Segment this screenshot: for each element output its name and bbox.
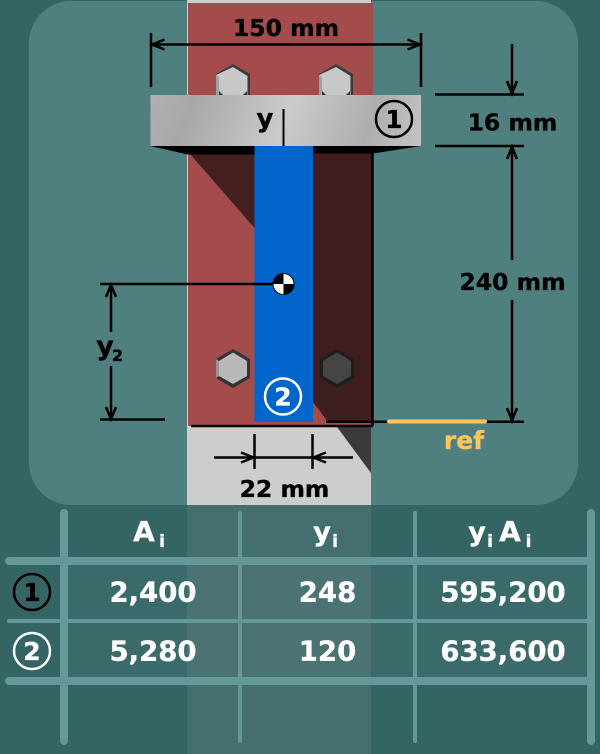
grey shadow on base (337, 427, 371, 473)
red web plate (188, 3, 373, 426)
dimension: 16 mm (435, 44, 557, 146)
header: Ai (133, 515, 165, 552)
row 2 values: 633,600 (440, 636, 566, 668)
header: Ai: A (133, 515, 155, 548)
dimension: 240 mm: 240 mm (459, 268, 566, 296)
part marker 1 (376, 101, 412, 137)
dimension: 150 mm (151, 14, 421, 87)
bolt: top right (319, 64, 353, 96)
header: yiAi (468, 515, 531, 552)
blue web top over shadow (254, 146, 313, 156)
header: yi: i (332, 532, 338, 552)
row 1 values: 595,200 (440, 576, 566, 608)
rounded panel (29, 1, 578, 505)
row 1 values: 2,400 (110, 576, 196, 608)
row 2 values: 5,280 (110, 636, 196, 668)
plate edges (191, 150, 373, 426)
dimension: 22 mm (214, 434, 353, 503)
centroid symbol (272, 273, 294, 295)
row marker 2: 2 (23, 637, 41, 666)
dimension: 240 mm (459, 147, 566, 421)
table (5, 509, 595, 745)
reference line: ref (444, 426, 485, 455)
header: yiAi: i (526, 532, 531, 552)
header: yiAi: A (499, 515, 521, 548)
part marker 1: 1 (385, 105, 403, 134)
axis label y with tick (257, 104, 284, 146)
row marker 2 (14, 633, 50, 669)
flange (150, 95, 421, 146)
dimension: y2: y (96, 331, 114, 362)
blue web (254, 146, 313, 422)
header: yi (313, 517, 338, 552)
flange shadow (150, 146, 421, 154)
row 1 values: 248 (299, 576, 356, 608)
bolt: bottom left (216, 349, 250, 388)
row marker 1 (14, 574, 50, 610)
part marker 2: 2 (274, 382, 292, 412)
header: Ai: i (159, 532, 165, 552)
part marker 2 (265, 378, 301, 414)
row marker 1: 1 (23, 578, 41, 607)
bolt: top left (216, 64, 250, 96)
table grid (5, 509, 595, 745)
bolt: bottom right (320, 349, 354, 388)
centroid leader line (100, 283, 283, 285)
header: yiAi: y (468, 517, 486, 548)
column strip behind table (187, 505, 371, 754)
shadow triangle on flange underside (190, 154, 254, 228)
header: yi: y (313, 517, 331, 548)
axis label y with tick: y (257, 104, 274, 134)
dimension: 150 mm: 150 mm (233, 14, 339, 42)
table row shading (68, 565, 587, 681)
dimension: y2 (96, 285, 165, 420)
light base plate (187, 0, 371, 505)
dimension: y2: 2 (112, 346, 123, 365)
row 2 values: 120 (299, 636, 356, 668)
dimension: 16 mm: 16 mm (468, 108, 557, 136)
dimension: 22 mm: 22 mm (240, 475, 329, 503)
dark right side of plate (313, 146, 372, 422)
row 1 values (110, 576, 566, 608)
row 2 values (110, 636, 566, 668)
header: yiAi: i (487, 532, 493, 552)
